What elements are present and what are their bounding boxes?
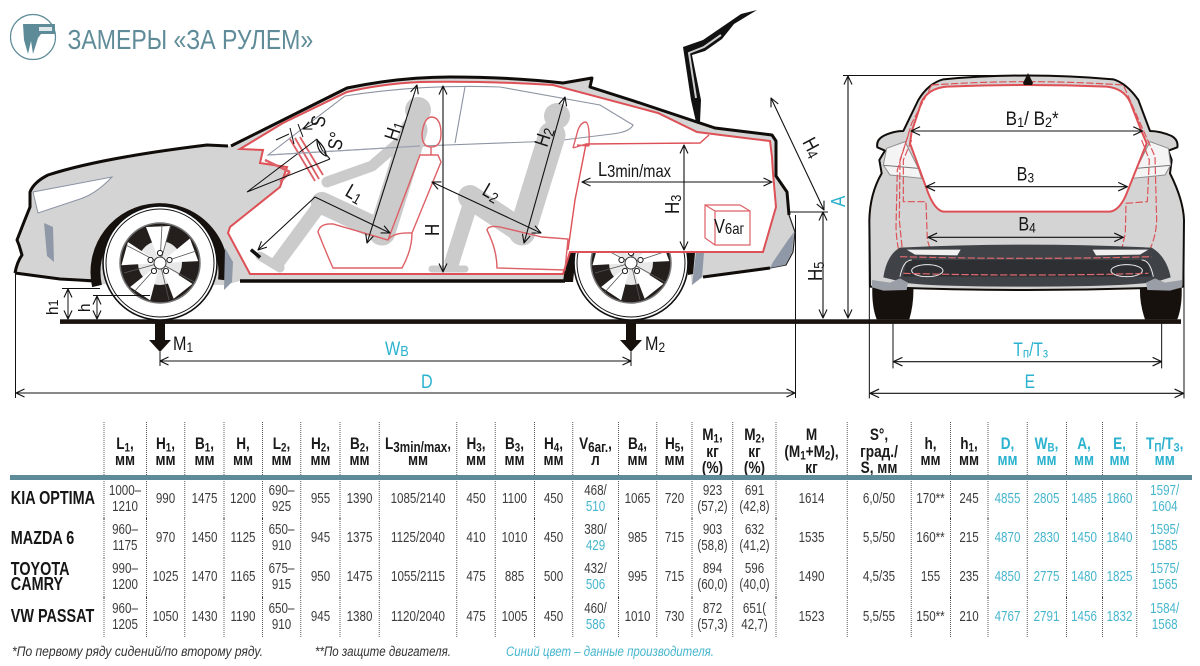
table header row: мм (194, 450, 215, 469)
dimension B1/B2: B (1006, 108, 1017, 129)
table header row: мм (1109, 450, 1130, 469)
row: Toyota Camry: 1825 (1107, 569, 1132, 585)
bumper reflectors (907, 250, 1148, 255)
row: Toyota Camry: 1575/ (1150, 561, 1179, 577)
row: Toyota Camry: CAMRY (11, 574, 63, 594)
row: VW Passat: 586 (586, 617, 605, 633)
boot volume box (705, 205, 750, 245)
row: Mazda 6: 970 (156, 530, 175, 546)
side sills (872, 278, 1182, 291)
dimension H5: 5 (810, 261, 827, 269)
dimension H4: 4 (803, 147, 822, 162)
load arrow M1 (149, 323, 193, 355)
rear seat (487, 122, 589, 270)
dimension E: E (1025, 370, 1035, 392)
dimension L3 min/max: L (598, 157, 607, 180)
table header row: B4, (628, 434, 647, 454)
dimension H4 (771, 98, 827, 210)
row: VW Passat: 210 (959, 609, 979, 625)
dimension H1 (367, 85, 417, 243)
table header row: мм (959, 450, 979, 469)
data table (10, 422, 1183, 637)
table header row: мм (1074, 450, 1094, 469)
row: Toyota Camry: 675– (269, 561, 294, 577)
row: Kia Optima: 1485 (1071, 491, 1097, 507)
table header row: мм (1036, 450, 1057, 469)
table header row: WB, (1035, 434, 1058, 454)
dimension S: S (306, 114, 330, 129)
dimension L2: L (479, 178, 498, 202)
row: Kia Optima: 2805 (1034, 491, 1059, 507)
table header row: мм (504, 450, 525, 469)
row: Toyota Camry: 235 (959, 569, 979, 585)
footnote: engine guard: **По защите двигателя. (315, 644, 451, 659)
table header row: H, (236, 434, 250, 452)
front wheel arch (95, 208, 223, 286)
row: Toyota Camry: 2775 (1034, 569, 1059, 585)
dimension B3 (926, 163, 1127, 187)
footnote: seat rows: *По первому ряду сидений/по второму ряду. (12, 644, 263, 659)
row: Toyota Camry: 4,5/35 (863, 569, 895, 585)
row: Mazda 6: 650– (269, 522, 294, 538)
row: Mazda 6: 1175 (113, 538, 137, 554)
row: Toyota Camry: 596 (745, 561, 764, 577)
dimension H5: H (804, 269, 826, 281)
dimension H2: 2 (539, 126, 558, 138)
steering column (265, 137, 323, 182)
row: Kia Optima: 1065 (625, 491, 650, 507)
row: Kia Optima: 923 (703, 483, 722, 499)
footnote: colour legend: Синий цвет – данные производителя. (506, 644, 714, 659)
table header row: M2, (744, 425, 765, 446)
row: Toyota Camry: 995 (628, 569, 647, 585)
dimension h1: h1 (43, 299, 62, 315)
row: Kia Optima: 245 (959, 491, 979, 507)
bumper dashed lines (900, 257, 1152, 275)
row: Mazda 6: 715 (665, 530, 684, 546)
row: VW Passat: 475 (466, 609, 486, 625)
dimension A: A (827, 195, 849, 207)
row: Mazda 6: (41,2) (739, 538, 770, 554)
boot volume box: V (714, 214, 725, 237)
boot outline (568, 135, 709, 250)
table header row: мм (408, 450, 428, 469)
row: VW Passat: 1584/ (1150, 601, 1179, 617)
roof antenna (1023, 73, 1033, 85)
table header row: D, (1001, 434, 1014, 452)
dimension H3: H (661, 202, 683, 214)
table header row: H5, (665, 434, 684, 454)
table header row: (%) (702, 458, 723, 477)
table header row: A, (1077, 434, 1091, 452)
table header row: M1, (702, 425, 723, 446)
table header row: B3, (505, 434, 524, 454)
dimension B1/B2: 1 (1017, 114, 1024, 130)
row: Toyota Camry: 1490 (799, 569, 824, 585)
row: Mazda 6: 1595/ (1150, 522, 1179, 538)
row: Mazda 6: 903 (703, 522, 722, 538)
row: VW Passat: 1190 (231, 609, 255, 625)
dimension h (75, 296, 150, 319)
front seat (318, 117, 441, 268)
rear view of car (869, 75, 1184, 398)
table header row: E, (1113, 434, 1126, 452)
dimension B1/B2 (911, 108, 1142, 131)
row: VW Passat: 960– (112, 601, 138, 617)
table header row: h, (924, 434, 937, 452)
table header row: мм (233, 450, 253, 469)
dimension L3 min/max (582, 157, 772, 182)
row: VW Passat: 1050 (153, 609, 178, 625)
row: Kia Optima: 510 (586, 499, 605, 515)
table header row: V6аг., (579, 434, 612, 456)
row: Toyota Camry: 990– (112, 561, 138, 577)
dimension B4: B (1018, 213, 1029, 235)
row: VW Passat: 1523 (799, 609, 824, 625)
row: Mazda 6: 410 (466, 530, 486, 546)
load arrow M1: 1 (186, 339, 193, 355)
table header row: л (591, 450, 600, 469)
row: Kia Optima: 1860 (1107, 491, 1132, 507)
row: VW Passat: 5,5/55 (863, 609, 895, 625)
dimension B3: 3 (1027, 170, 1034, 186)
interior cut-out in red (228, 82, 776, 274)
row: VW Passat (10, 601, 1180, 633)
row: Toyota Camry: 894 (703, 561, 722, 577)
dimension L1: L (342, 179, 361, 203)
row: Toyota Camry: 1565 (1152, 577, 1178, 593)
dimension B1/B2: * (1052, 108, 1059, 129)
row: Mazda 6: 1840 (1107, 530, 1132, 546)
dimension H2 (524, 97, 565, 243)
table header row: (M1+M2), (784, 442, 839, 462)
row: VW Passat: 1568 (1152, 617, 1178, 633)
table header row: h1, (960, 434, 978, 454)
row: Toyota Camry: 1025 (153, 569, 178, 585)
table header row: кг (748, 442, 761, 461)
row: Kia Optima (11, 483, 1180, 515)
row: VW Passat: 1456 (1071, 609, 1097, 625)
table header row: мм (310, 450, 331, 469)
row: Kia Optima: 691 (745, 483, 764, 499)
row: Kia Optima: 720 (665, 491, 684, 507)
row: Toyota Camry: 1475 (347, 569, 372, 585)
row: Kia Optima: 450 (466, 491, 486, 507)
row: VW Passat: 1380 (347, 609, 372, 625)
front wheel (103, 206, 217, 320)
row: Kia Optima: 450 (544, 491, 563, 507)
row: Mazda 6: 215 (959, 530, 979, 546)
dimension h1 (43, 288, 100, 319)
dimension H1: H (380, 125, 405, 143)
dimension D (16, 215, 796, 398)
row: Kia Optima: 1597/ (1150, 483, 1179, 499)
row: Kia Optima: 925 (272, 499, 291, 515)
table header row: (%) (744, 458, 765, 477)
row: VW Passat: 730 (665, 609, 684, 625)
row: VW Passat: 42,7) (741, 617, 768, 633)
rear wheels (872, 287, 1182, 319)
row: VW Passat: 651( (743, 601, 766, 617)
table header row: мм (920, 450, 941, 469)
dimension H3 (661, 145, 684, 250)
table header rule (10, 475, 1192, 480)
headlight (33, 177, 112, 213)
row: Kia Optima: 170** (916, 491, 945, 507)
row: Kia Optima: 1085/2140 (391, 491, 445, 507)
row: Mazda 6: (58,8) (697, 538, 728, 554)
dimension L2 (432, 178, 541, 233)
boot volume box: 6аг (725, 221, 744, 238)
row: Kia Optima: 6,0/50 (863, 491, 895, 507)
front bumper vent (44, 223, 54, 262)
shoulder dashed lines (896, 82, 1157, 273)
dimension track width (893, 323, 1162, 368)
table header row: H2, (311, 434, 330, 454)
table header row: мм (627, 450, 648, 469)
dimension L1 (250, 179, 390, 259)
dimension B4 (928, 213, 1123, 237)
load arrow M2 (620, 323, 665, 355)
table header row: мм (664, 450, 685, 469)
table header row: M (806, 425, 817, 444)
table header row: L1, (116, 434, 134, 454)
row: Kia Optima: 1100 (502, 491, 527, 507)
rear arch (563, 253, 695, 282)
table header row: L3min/max, (385, 434, 451, 456)
table header row: град./ (860, 442, 898, 461)
rear bumper (883, 245, 1171, 287)
row: VW Passat: 1430 (192, 609, 217, 625)
row: Kia Optima: 4855 (995, 491, 1020, 507)
row: Mazda 6: 429 (586, 538, 605, 554)
table header row: мм (1155, 450, 1175, 469)
row: Kia Optima: (42,8) (739, 499, 770, 515)
dimension E (869, 220, 1184, 398)
load arrow M2: M (645, 333, 658, 354)
row: Kia Optima: 1390 (347, 491, 372, 507)
rear body silhouette (869, 75, 1184, 290)
row: Toyota Camry: 1480 (1071, 569, 1097, 585)
row: Mazda 6: MAZDA 6 (11, 528, 74, 548)
rear wheel (574, 206, 688, 320)
dimension B4: 4 (1029, 220, 1036, 236)
dimension H3: 3 (667, 194, 684, 202)
table header row: мм (997, 450, 1018, 469)
row: VW Passat: 1005 (502, 609, 527, 625)
row: VW Passat: 1120/2040 (391, 609, 445, 625)
row: Mazda 6: 910 (272, 538, 291, 554)
row: VW Passat: 150** (916, 609, 945, 625)
row: Toyota Camry (10, 559, 1180, 594)
row: Toyota Camry: 1470 (192, 569, 217, 585)
front mudflap (224, 248, 233, 290)
row: Toyota Camry: 432/ (584, 561, 607, 577)
row: VW Passat: 910 (272, 617, 291, 633)
row: Toyota Camry: 500 (544, 569, 563, 585)
row: Toyota Camry: 475 (466, 569, 486, 585)
row: Mazda 6: 1585 (1152, 538, 1178, 554)
row: Mazda 6: 985 (628, 530, 647, 546)
dimension track width: з (1043, 344, 1048, 361)
table header row: мм (155, 450, 176, 469)
dimension wheelbase WB (160, 338, 631, 366)
dimension wheelbase WB: B (400, 342, 409, 359)
row: Mazda 6 (11, 522, 1180, 554)
dimension wheelbase WB: W (385, 338, 400, 359)
row: Mazda 6: 1535 (799, 530, 824, 546)
table header row: S, мм (861, 458, 897, 477)
dimension L3 min/max: 3min/max (607, 162, 672, 181)
dimension H: H (421, 224, 443, 236)
row: VW Passat: 450 (544, 609, 563, 625)
table header row: мм (543, 450, 564, 469)
dimension B3: B (1017, 163, 1027, 185)
side view of car (15, 10, 795, 320)
row: Kia Optima: KIA OPTIMA (11, 488, 95, 508)
row: Kia Optima: 1200 (230, 491, 256, 507)
row: Kia Optima: 990 (156, 491, 175, 507)
row: Toyota Camry: 1200 (112, 577, 138, 593)
row: Kia Optima: 1000– (109, 483, 141, 499)
icon: caliper logo (10, 14, 56, 60)
row: Kia Optima: 1604 (1152, 499, 1178, 515)
row: VW Passat: 1010 (625, 609, 650, 625)
table header row: S°, (870, 425, 888, 444)
load arrow M1: M (173, 333, 186, 354)
table header row: мм (271, 450, 292, 469)
row: Toyota Camry: 1165 (231, 569, 255, 585)
row: Toyota Camry: (60,0) (697, 577, 728, 593)
row: Kia Optima: 1475 (192, 491, 217, 507)
row: Mazda 6: 2830 (1034, 530, 1059, 546)
dimension L2: 2 (487, 188, 502, 207)
row: Mazda 6: 380/ (584, 522, 607, 538)
load arrow M2: 2 (658, 339, 665, 355)
row: Kia Optima: 1614 (799, 491, 824, 507)
row: Mazda 6: 632 (745, 522, 764, 538)
row: VW Passat: 4767 (995, 609, 1020, 625)
row: Kia Optima: (57,2) (697, 499, 728, 515)
row: Kia Optima: 468/ (584, 483, 607, 499)
tail lights (883, 142, 1171, 178)
row: Mazda 6: 1450 (192, 530, 217, 546)
table header row (115, 425, 1183, 477)
body outline (15, 77, 789, 281)
dimension S°: S° (323, 130, 348, 152)
row: Toyota Camry: 1055/2115 (391, 569, 445, 585)
dimension track width: T (1013, 338, 1023, 360)
row: Toyota Camry: 4850 (995, 569, 1020, 585)
row: Mazda 6: 160** (916, 530, 945, 546)
dimension H5 (788, 212, 828, 318)
dimension S° (317, 130, 348, 156)
row: VW Passat: 1832 (1107, 609, 1132, 625)
row: Toyota Camry: 950 (311, 569, 330, 585)
row: Mazda 6: 1450 (1071, 530, 1097, 546)
row: Mazda 6: 1375 (347, 530, 372, 546)
row: Toyota Camry: TOYOTA (11, 559, 69, 579)
row: Mazda 6: 1125/2040 (391, 530, 445, 546)
dimension B1/B2: 2 (1045, 114, 1052, 130)
dimension B1/B2: / B (1024, 108, 1045, 129)
row: Mazda 6: 945 (311, 530, 330, 546)
row: Kia Optima: 1210 (112, 499, 138, 515)
dimension H1: 1 (389, 120, 408, 132)
row: Toyota Camry: (40,0) (739, 577, 770, 593)
row: VW Passat: 2791 (1034, 609, 1059, 625)
title: ЗАМЕРЫ «ЗА РУЛЕМ» (68, 25, 313, 56)
dimension track width: п (1023, 344, 1029, 361)
row: Toyota Camry: 885 (505, 569, 524, 585)
table header row: B2, (350, 434, 369, 454)
rear passenger silhouette (432, 103, 570, 269)
table header row: мм (349, 450, 370, 469)
row: VW Passat: 460/ (584, 601, 607, 617)
view lines of steering (247, 139, 330, 192)
row: VW Passat: 1205 (112, 617, 138, 633)
row: VW Passat: (57,3) (697, 617, 728, 633)
table header row: кг (805, 458, 818, 477)
row: VW Passat: 872 (703, 601, 722, 617)
row: VW Passat: VW PASSAT (11, 606, 94, 626)
table header row: мм (466, 450, 486, 469)
window outline (268, 86, 633, 155)
driver silhouette (260, 97, 431, 268)
dimension D: D (421, 371, 433, 392)
row: Mazda 6: 960– (112, 522, 138, 538)
row: Kia Optima: 690– (269, 483, 294, 499)
table header row: B1, (195, 434, 214, 454)
dimension H4: H (798, 133, 824, 155)
table header row: H1, (156, 434, 175, 454)
table header row: H4, (544, 434, 563, 454)
table header row: кг (706, 442, 719, 461)
dimension h: h (75, 303, 94, 312)
dimension L1: 1 (350, 189, 365, 208)
row: VW Passat: 650– (269, 601, 294, 617)
row: VW Passat: 945 (311, 609, 330, 625)
row: Mazda 6: 5,5/50 (863, 530, 895, 546)
row: Toyota Camry: 506 (586, 577, 605, 593)
table header row: TП/TЗ, (1146, 434, 1183, 454)
dimension H2: H (530, 131, 555, 149)
table header row: L2, (273, 434, 290, 454)
row: Mazda 6: 4870 (995, 530, 1020, 546)
row: Toyota Camry: 155 (921, 569, 940, 585)
ground line (60, 319, 1181, 324)
dimension S (276, 114, 330, 144)
dimension track width: /T (1029, 338, 1043, 360)
row: Toyota Camry: 715 (665, 569, 684, 585)
car body silhouette (15, 77, 795, 285)
rear window and boot opening (910, 85, 1147, 212)
exhaust tips (900, 260, 1153, 277)
row: Mazda 6: 450 (544, 530, 563, 546)
row: Kia Optima: 955 (311, 491, 330, 507)
table header row: H3, (466, 434, 486, 454)
row: Mazda 6: 1125 (231, 530, 255, 546)
table header row: мм (115, 450, 135, 469)
row: Mazda 6: 1010 (502, 530, 527, 546)
open boot lid (683, 10, 757, 122)
row: Toyota Camry: 915 (272, 577, 291, 593)
